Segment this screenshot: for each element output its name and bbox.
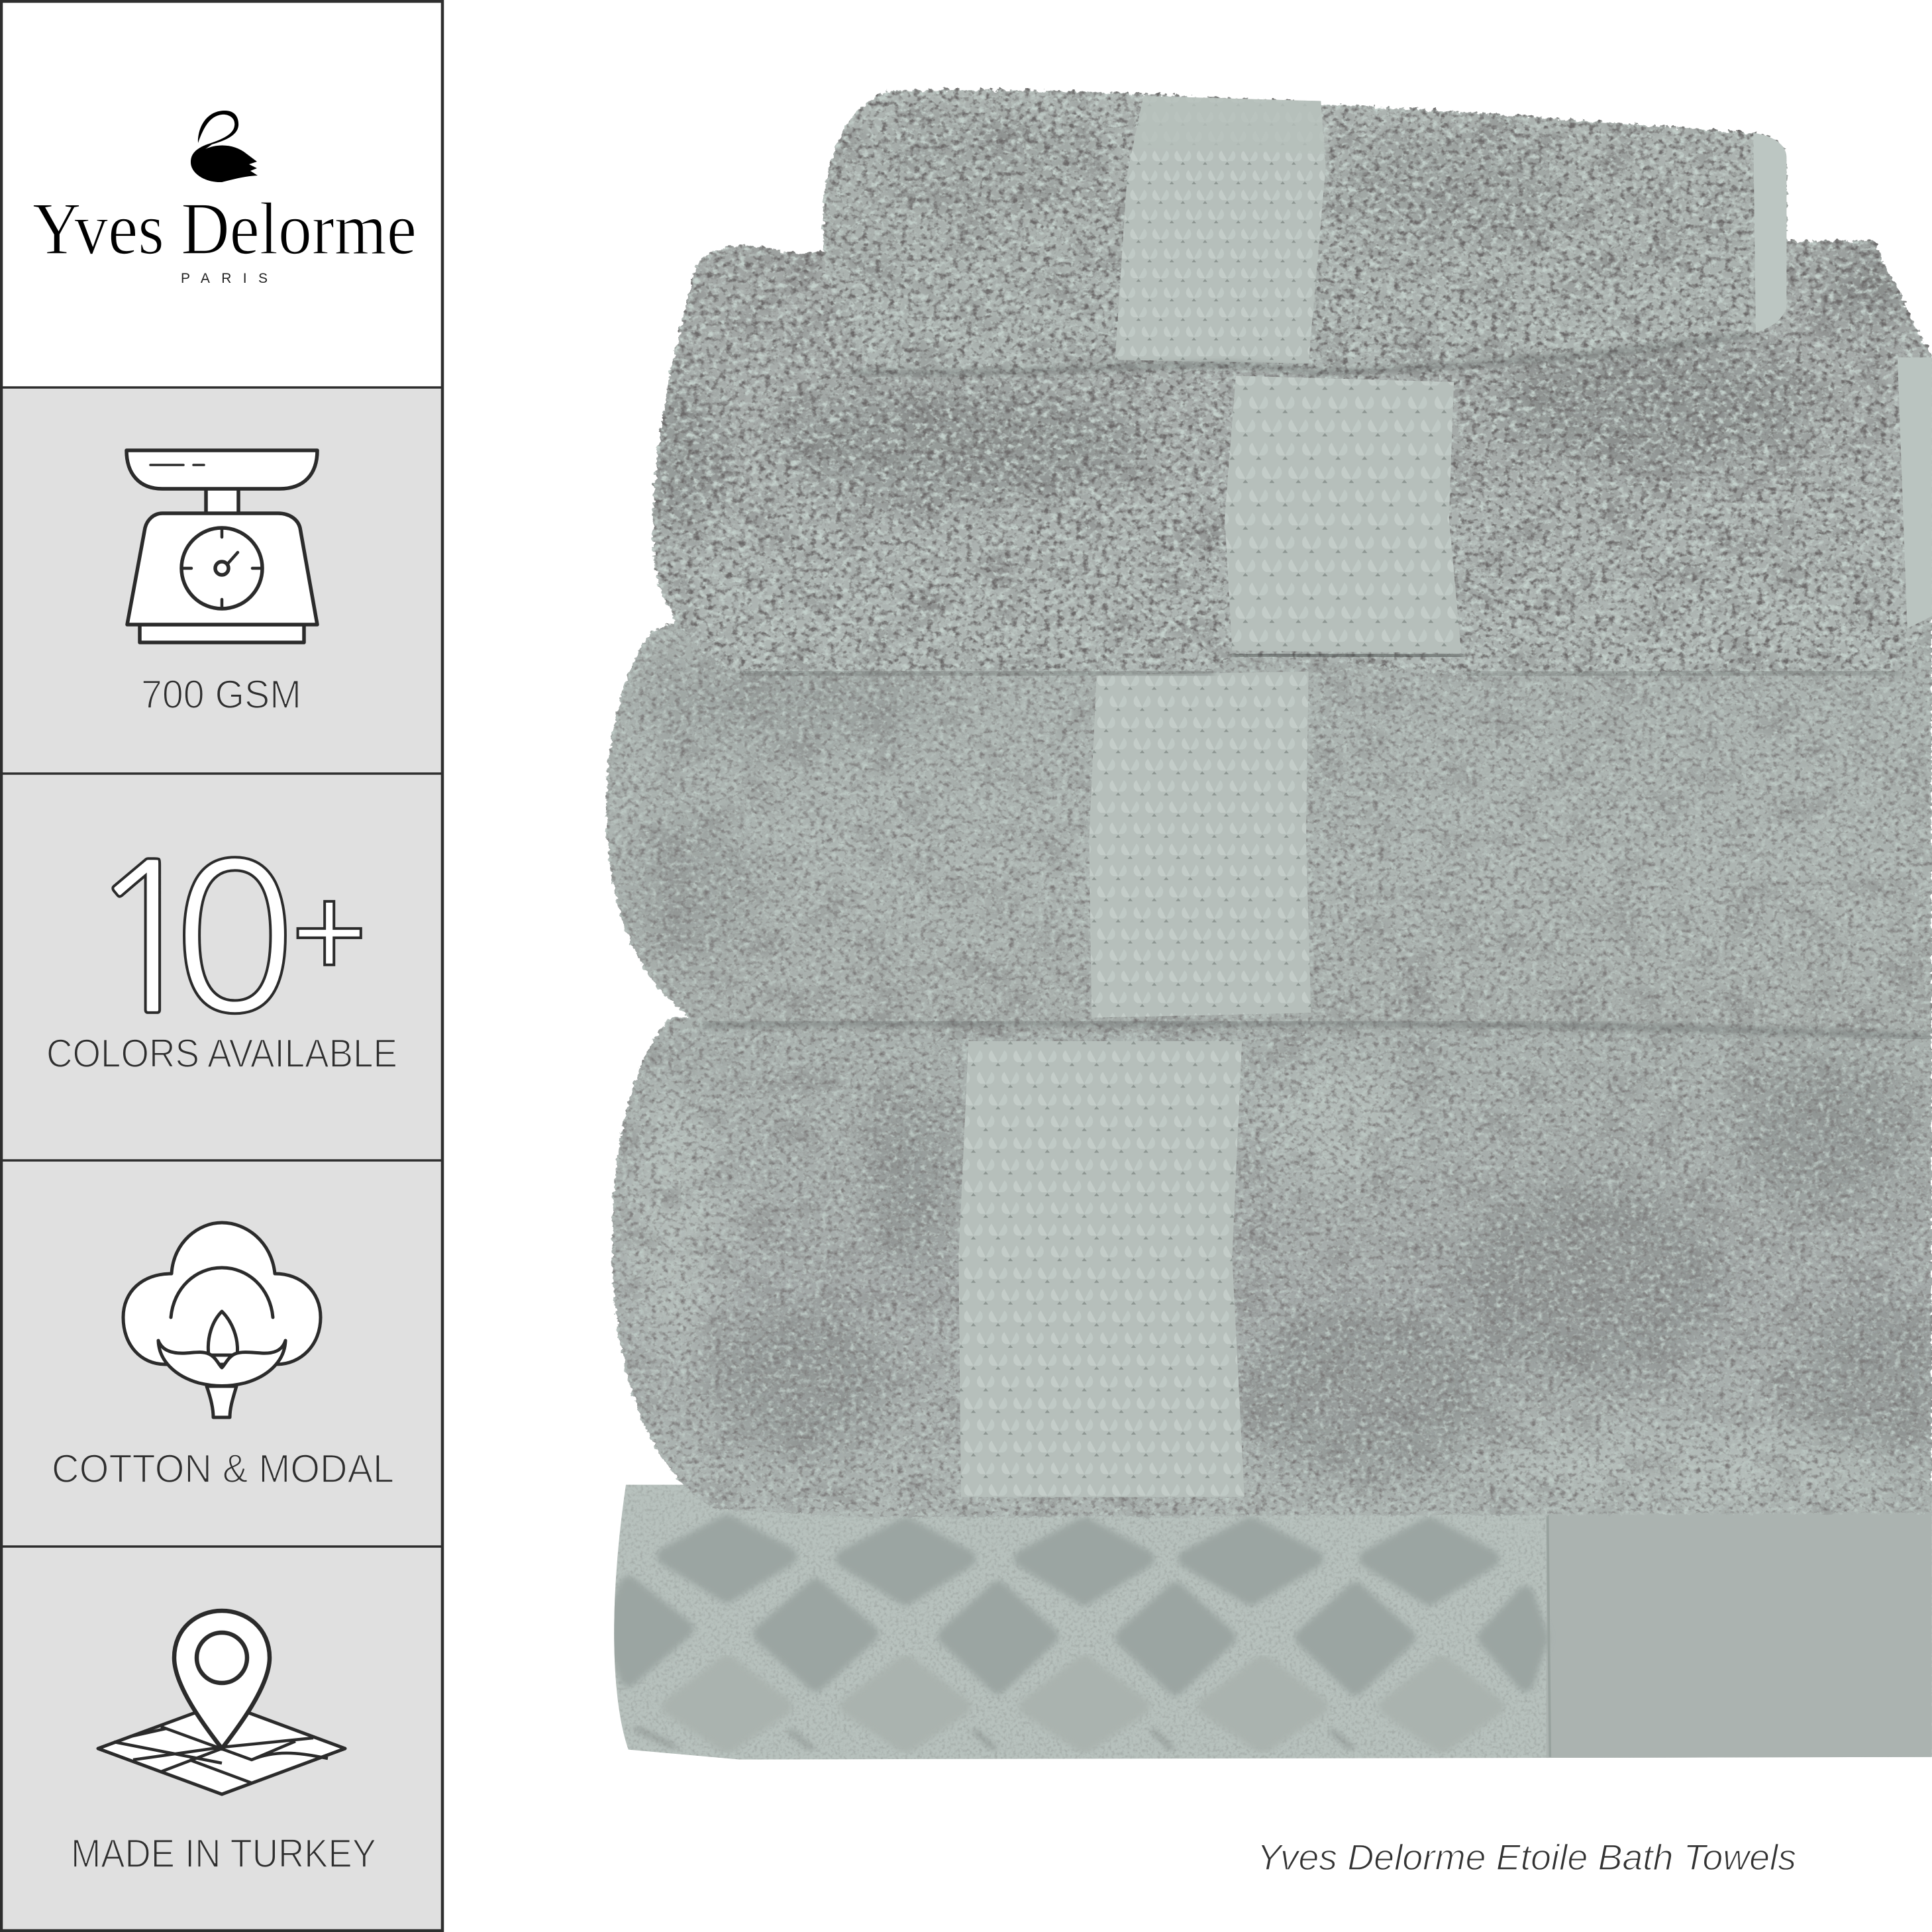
big number 10+: +	[291, 859, 367, 1004]
big number 10+: 0	[172, 835, 297, 1042]
towel 2: hand towel	[640, 240, 1932, 675]
icon: cotton boll	[123, 1223, 321, 1417]
photo: stack of towels	[604, 89, 1932, 1762]
towel 3: bath towel	[606, 616, 1932, 1037]
brand city: PARIS	[181, 271, 268, 286]
icon: kitchen scale	[127, 450, 317, 642]
icon: swan	[191, 111, 258, 182]
towel 4: large bath sheet	[612, 1017, 1932, 1518]
panel: logo	[1, 1, 442, 387]
caption: Yves Delorme Etoile Bath Towels	[1257, 1837, 1796, 1878]
sidebar	[1, 1, 442, 1931]
panel: weight	[1, 387, 442, 774]
panel: colors	[1, 774, 442, 1160]
label: cotton and modal: COTTON & MODAL	[52, 1447, 394, 1491]
towel 1: washcloth	[823, 89, 1786, 374]
towel 5: diamond bath mat	[604, 1478, 1932, 1762]
icon: map pin	[98, 1611, 345, 1794]
brand name: Yves Delorme	[32, 188, 417, 270]
label: made in turkey: MADE IN TURKEY	[71, 1831, 376, 1876]
label: 700 GSM: 700 GSM	[141, 672, 301, 717]
panel: material	[1, 1160, 442, 1547]
label: colors available: COLORS AVAILABLE	[46, 1031, 397, 1076]
big number 10+: 1	[83, 835, 209, 1042]
panel: origin	[1, 1547, 442, 1931]
